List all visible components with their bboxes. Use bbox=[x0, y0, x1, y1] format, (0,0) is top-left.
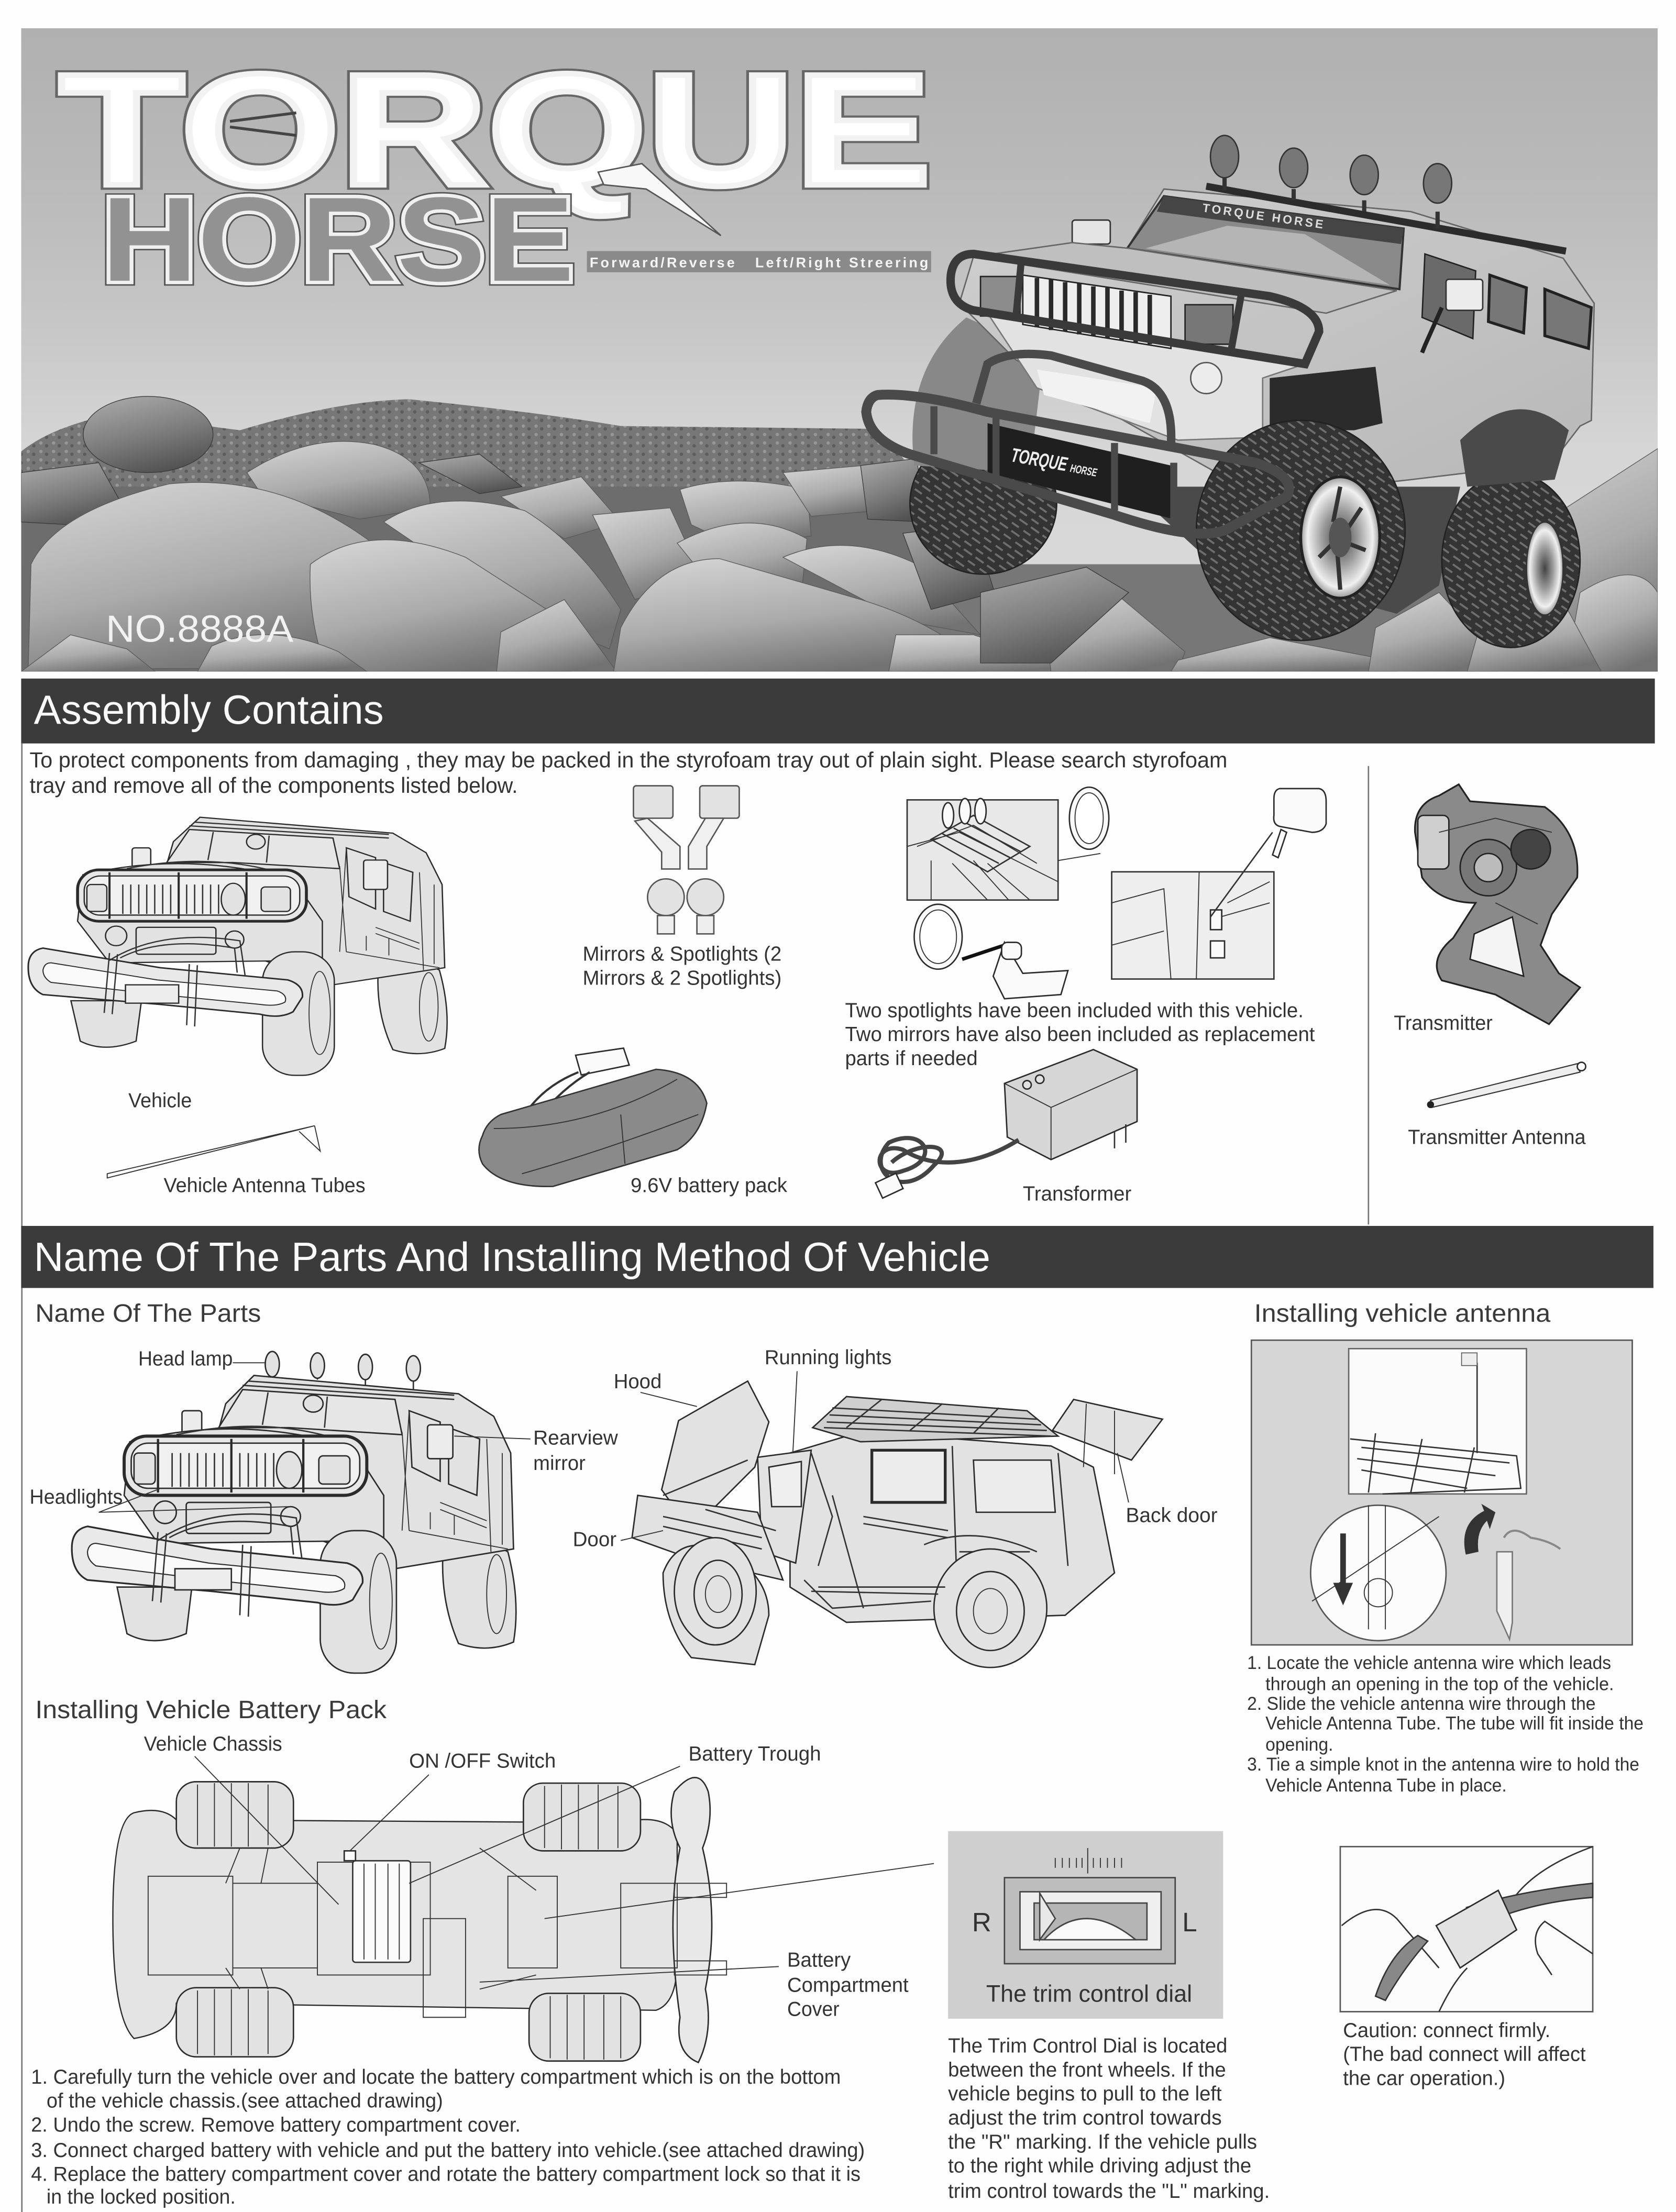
intro text: tray and remove all of the components listed below. bbox=[30, 773, 518, 798]
label: vehicle: Vehicle bbox=[128, 1090, 192, 1112]
windshield bbox=[1127, 196, 1404, 289]
inset: antenna on roof rack bbox=[1349, 1348, 1526, 1494]
callout: back door bbox=[1117, 1453, 1218, 1527]
callout: battery compartment cover: Cover bbox=[787, 1998, 840, 2021]
callout: rearview mirror: mirror bbox=[533, 1452, 586, 1475]
text: battery steps: 2. Undo the screw. Remove battery compartment cover. bbox=[31, 2114, 521, 2136]
chassis shadow bbox=[1129, 486, 1460, 614]
text: caution note bbox=[1343, 2019, 1586, 2090]
grille guard bbox=[951, 254, 1319, 364]
text: battery steps: in the locked position. bbox=[47, 2186, 236, 2208]
illustration: connecting plug by hand bbox=[1340, 1846, 1593, 2011]
text: battery steps: of the vehicle chassis.(see attached drawing) bbox=[47, 2090, 443, 2113]
inset: antenna tube into opening bbox=[1310, 1505, 1446, 1641]
title logo: HORSE: HORSE bbox=[102, 172, 574, 306]
callout: battery trough: Battery Trough bbox=[688, 1743, 821, 1765]
illustration: vehicle bbox=[28, 817, 447, 1075]
intro text bbox=[30, 747, 1227, 798]
title logo: HORSE: HORSE bbox=[102, 172, 574, 306]
text: antenna steps bbox=[1247, 1653, 1644, 1796]
title logo: TORQUE: TORQUE bbox=[59, 40, 931, 219]
subheading: installing vehicle battery pack: Installing Vehicle Battery Pack bbox=[35, 1696, 387, 1724]
intro text: To protect components from damaging , they may be packed in the styrofoam tray out of plain sight. Please search styrofoam bbox=[30, 747, 1227, 772]
tagline strip: Forward/Reverse Left/Right Streering bbox=[590, 255, 928, 270]
label: mirrors and spotlights: Mirrors & Spotlights (2 bbox=[582, 943, 781, 966]
panel: trim control dial bbox=[948, 1831, 1223, 2019]
illustration: vehicle chassis underside bbox=[113, 1777, 726, 2062]
rear wheel bbox=[1442, 472, 1580, 647]
text: trim control explanation: the "R" marking. If the vehicle pulls bbox=[948, 2131, 1257, 2153]
subheading: name of the parts: Name Of The Parts bbox=[35, 1299, 261, 1328]
callout: rearview mirror bbox=[454, 1427, 619, 1475]
text: antenna steps: Vehicle Antenna Tube in place. bbox=[1265, 1775, 1507, 1796]
header bar: Name Of The Parts bbox=[21, 1226, 1653, 1288]
front right wheel bbox=[1196, 421, 1405, 640]
illustration: transmitter bbox=[1415, 784, 1580, 1024]
text: antenna steps: 2. Slide the vehicle antenna wire through the bbox=[1247, 1694, 1595, 1714]
header bar: Assembly Contains bbox=[21, 679, 1655, 744]
illustration: mirror install bbox=[1112, 789, 1326, 979]
illustration: mirrors bbox=[633, 786, 739, 869]
label: battery pack: 9.6V battery pack bbox=[631, 1174, 787, 1197]
title logo: TORQUE: TORQUE bbox=[59, 40, 931, 219]
illustration: transmitter antenna bbox=[1427, 1062, 1586, 1108]
callout: battery compartment cover: Battery bbox=[787, 1949, 851, 1971]
text: battery steps bbox=[31, 2066, 865, 2208]
panel: installing vehicle antenna diagram bbox=[1251, 1340, 1632, 1645]
callout: rearview mirror: Rearview bbox=[533, 1427, 619, 1450]
callout: battery compartment cover bbox=[480, 1949, 909, 2021]
callout: head lamp: Head lamp bbox=[138, 1348, 233, 1370]
model number: NO.8888A bbox=[106, 608, 294, 650]
callout: door: Door bbox=[573, 1528, 616, 1551]
text: antenna steps: 3. Tie a simple knot in the antenna wire to hold the bbox=[1247, 1754, 1639, 1775]
text: caution note: (The bad connect will affect bbox=[1343, 2043, 1586, 2066]
text: spotlight note: parts if needed bbox=[845, 1047, 978, 1070]
text: trim control explanation: between the front wheels. If the bbox=[948, 2059, 1226, 2081]
illustration: spotlight install on roof bbox=[907, 787, 1109, 900]
dial label: R: R bbox=[972, 1907, 991, 1937]
label: transmitter: Transmitter bbox=[1394, 1012, 1493, 1035]
illustration: vehicle front view bbox=[72, 1352, 516, 1673]
text: antenna steps: 1. Locate the vehicle antenna wire which leads bbox=[1247, 1653, 1611, 1673]
side windows bbox=[1422, 254, 1476, 339]
head lamps bbox=[265, 1352, 421, 1389]
left front wheel behind bumper bbox=[910, 433, 1057, 574]
callout: headlights: Headlights bbox=[30, 1486, 123, 1509]
hood and front clip bbox=[974, 242, 1397, 313]
text: spotlight note: Two spotlights have been included with this vehicle. bbox=[845, 999, 1304, 1022]
subheading: installing vehicle antenna: Installing vehicle antenna bbox=[1254, 1299, 1550, 1328]
arrow line: chassis to trim dial bbox=[545, 1864, 934, 1919]
header bar: Name Of The Parts: Name Of The Parts And Installing Method Of Vehicle bbox=[34, 1234, 990, 1280]
illustration: transformer bbox=[875, 1049, 1137, 1198]
truck photo bbox=[866, 136, 1594, 647]
dial caption: The trim control dial bbox=[986, 1981, 1192, 2007]
text: caution note: Caution: connect firmly. bbox=[1343, 2019, 1550, 2042]
illustration: vehicle antenna tube bbox=[107, 1126, 320, 1178]
truck photo: TORQUE HORSE bbox=[1201, 201, 1326, 231]
dial label: L: L bbox=[1182, 1907, 1197, 1937]
text: trim control explanation: to the right while driving adjust the bbox=[948, 2155, 1251, 2177]
callout: battery trough bbox=[409, 1743, 821, 1883]
text: spotlight note bbox=[845, 999, 1315, 1070]
callout: hood: Hood bbox=[614, 1370, 661, 1393]
brush bumper bbox=[866, 354, 1289, 534]
truck body bbox=[960, 189, 1594, 486]
text: battery steps: 4. Replace the battery compartment cover and rotate the battery compartment lock so that it is bbox=[31, 2163, 861, 2186]
side mirrors bbox=[1072, 220, 1110, 244]
callout: headlights bbox=[30, 1486, 289, 1512]
callout: running lights: Running lights bbox=[765, 1346, 891, 1369]
label: antenna tubes: Vehicle Antenna Tubes bbox=[163, 1174, 366, 1197]
text: trim control explanation: adjust the trim control towards bbox=[948, 2107, 1222, 2129]
callout: door bbox=[573, 1528, 663, 1551]
arrow: curved turn bbox=[1464, 1504, 1495, 1555]
callout: vehicle chassis bbox=[144, 1733, 338, 1905]
hero banner: photo of truck on rocks bbox=[21, 28, 1658, 671]
illustration: spotlight mount bbox=[914, 904, 1068, 999]
illustration: vehicle side view, doors open bbox=[632, 1381, 1163, 1667]
callout: battery compartment cover: Compartment bbox=[787, 1974, 909, 1997]
illustration: spotlights bbox=[647, 879, 724, 934]
illustration: battery pack bbox=[479, 1048, 707, 1187]
roof rack and spotlights bbox=[1206, 136, 1566, 251]
text: spotlight note: Two mirrors have also been included as replacement bbox=[845, 1023, 1315, 1046]
callout: on off switch: ON /OFF Switch bbox=[409, 1750, 556, 1772]
text: battery steps: 1. Carefully turn the vehicle over and locate the battery compartment which is on the bottom bbox=[31, 2066, 841, 2088]
hero rocks bbox=[21, 396, 1658, 671]
text: caution note: the car operation.) bbox=[1343, 2067, 1505, 2090]
panel frame lines bbox=[22, 744, 1369, 2212]
text: antenna steps: Vehicle Antenna Tube. The tube will fit inside the bbox=[1265, 1713, 1644, 1734]
arrow: push down bbox=[1333, 1533, 1353, 1606]
callout: back door: Back door bbox=[1126, 1505, 1218, 1527]
label: mirrors and spotlights: Mirrors & 2 Spotlights) bbox=[582, 967, 781, 989]
callout: running lights bbox=[765, 1346, 891, 1453]
header bar: Assembly Contains: Assembly Contains bbox=[34, 687, 384, 733]
callout: on off switch bbox=[350, 1750, 556, 1851]
callout: hood bbox=[614, 1370, 697, 1407]
antenna tube with knot bbox=[1497, 1531, 1560, 1639]
label: transformer: Transformer bbox=[1023, 1182, 1131, 1205]
brush bumper: TORQUE HORSE bbox=[1009, 444, 1099, 481]
text: antenna steps: through an opening in the top of the vehicle. bbox=[1265, 1674, 1614, 1694]
text: trim control explanation bbox=[948, 2035, 1270, 2203]
label: mirrors and spotlights bbox=[582, 943, 781, 989]
wheel well bbox=[1270, 367, 1383, 430]
text: trim control explanation: vehicle begins to pull to the left bbox=[948, 2083, 1222, 2105]
label: transmitter antenna: Transmitter Antenna bbox=[1408, 1126, 1586, 1149]
hero sky bbox=[21, 28, 1658, 565]
text: trim control explanation: trim control towards the "L" marking. bbox=[948, 2180, 1270, 2203]
text: battery steps: 3. Connect charged battery with vehicle and put the battery into vehicle.(see attached drawing) bbox=[31, 2139, 865, 2162]
callout: vehicle chassis: Vehicle Chassis bbox=[144, 1733, 282, 1755]
text: antenna steps: opening. bbox=[1265, 1734, 1333, 1755]
text: trim control explanation: The Trim Control Dial is located bbox=[948, 2035, 1227, 2058]
